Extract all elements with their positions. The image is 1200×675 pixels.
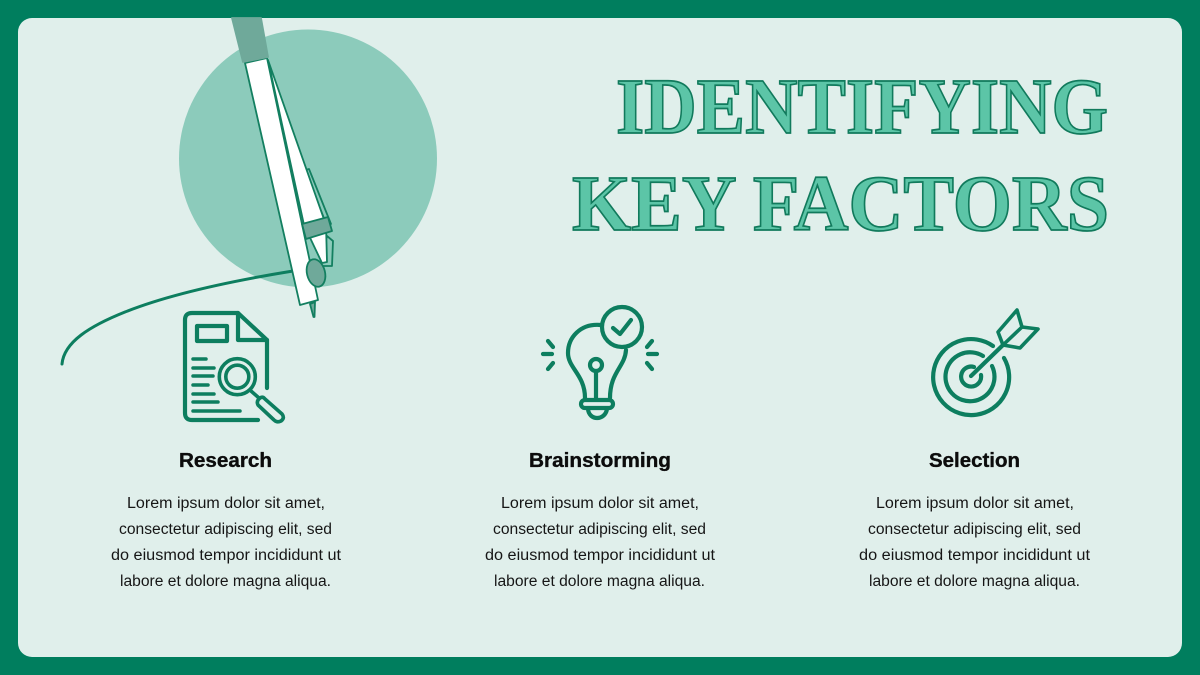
text block: research: consectetur adipiscing elit, sed [119, 521, 332, 538]
icon: drawing compass [232, 18, 333, 317]
text block: research: Lorem ipsum dolor sit amet, [127, 495, 325, 512]
heading: selection: Selection [929, 450, 1020, 472]
title: IDENTIFYING [616, 64, 1108, 151]
text block: selection: do eiusmod tempor incididunt ut [859, 547, 1091, 564]
text block: selection: labore et dolore magna aliqua. [869, 573, 1080, 590]
text block: selection: Lorem ipsum dolor sit amet, [876, 495, 1074, 512]
text block: research: do eiusmod tempor incididunt ut [111, 547, 342, 564]
icon: research document with magnifier [185, 313, 283, 422]
heading: research: Research [179, 450, 272, 472]
text block: research [111, 495, 342, 590]
text block: brainstorming: do eiusmod tempor incididunt ut [485, 547, 716, 564]
text block: brainstorming: consectetur adipiscing elit, sed [493, 521, 706, 538]
text block: brainstorming: Lorem ipsum dolor sit amet, [501, 495, 699, 512]
text block: selection: consectetur adipiscing elit, sed [868, 521, 1081, 538]
icon: light bulb with check mark [543, 307, 657, 418]
title [572, 64, 1109, 248]
text block: brainstorming [485, 495, 716, 590]
icon: target with arrow [933, 310, 1038, 415]
text block: research: labore et dolore magna aliqua. [120, 573, 331, 590]
text block: selection [859, 495, 1091, 590]
text block: brainstorming: labore et dolore magna aliqua. [494, 573, 705, 590]
decorative teal circle [179, 30, 437, 288]
heading: brainstorming: Brainstorming [529, 450, 671, 472]
drawn arc curve [62, 271, 293, 364]
title: KEY FACTORS [572, 161, 1109, 248]
